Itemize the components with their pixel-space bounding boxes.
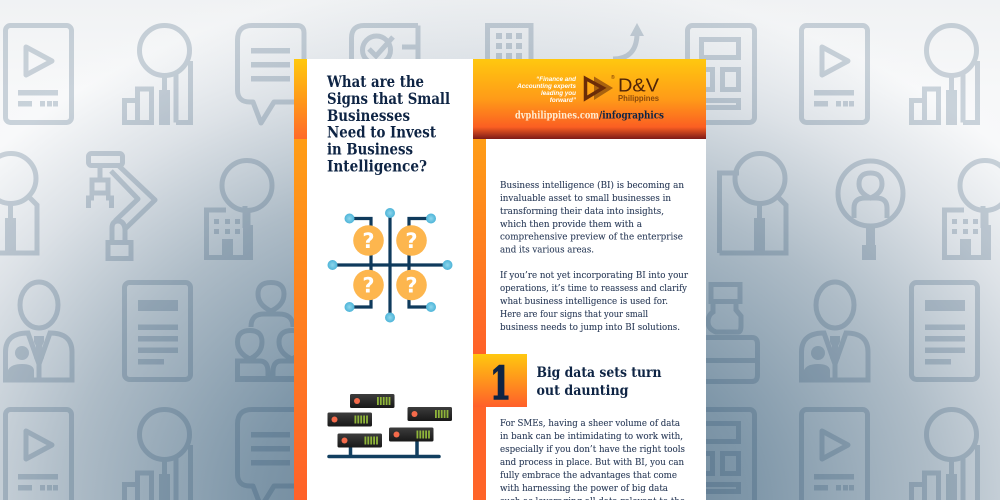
second paragraph: Here are four signs that your small [500,309,648,320]
second paragraph: operations, it’s time to reassess and clarify [500,283,688,294]
second paragraph: what business intelligence is used for. [500,296,668,307]
tagline: Accounting experts [516,83,576,90]
icon: question marks circuit: ? [362,229,375,253]
heading: big data sets [536,365,662,399]
website url: /infographics [599,110,664,122]
title [326,72,450,176]
title: Intelligence? [327,156,427,176]
website url [515,110,664,122]
title: Signs that Small [327,89,450,108]
section 1 body text: For SMEs, having a sheer volume of data [500,418,680,429]
section 1 body text: fully embrace the advantages that come [500,470,677,481]
title: in Business [327,140,413,158]
number badge 1: 1 [490,357,511,410]
intro paragraph: which then provide them with a [500,219,642,230]
intro paragraph: transforming their data into insights, [500,206,664,217]
intro paragraph: invaluable asset to small businesses in [500,193,671,204]
second paragraph: If you’re not yet incorporating BI into your [500,270,689,281]
logo: D&V Philippines: ® [611,74,615,81]
website url: dvphilippines.com [515,110,600,122]
tagline: forward” [550,97,577,104]
tagline: “Finance and [536,76,576,83]
header band [473,59,706,139]
intro paragraph [500,180,684,256]
logo: D&V Philippines: Philippines [618,94,660,103]
title: Businesses [327,106,410,125]
icon: question marks circuit: ? [362,274,375,298]
intro paragraph: Business intelligence (BI) is becoming an [500,180,684,191]
logo: D&V Philippines [586,74,660,103]
tagline [516,76,577,104]
section 1 body text: and process in place. But with BI, you can [500,457,684,468]
title: Need to Invest [327,122,437,142]
section 1 body text [500,418,685,500]
section 1 body text: especially if you don’t have the right tools [500,444,685,455]
icon: data servers [328,394,452,456]
intro paragraph: comprehensive preview of the enterprise [500,232,683,242]
title: What are the [326,72,424,91]
logo: D&V Philippines: D&V [618,74,660,96]
panel: infographic page [294,59,706,500]
number badge 1 [473,354,527,410]
second paragraph [500,270,689,333]
section 1 body text: in bank can be intimidating to work with, [500,431,683,442]
second paragraph: business needs to jump into BI solutions. [500,322,680,333]
left orange strip [294,59,307,500]
section 1 body text: with harnessing the power of big data [500,483,668,494]
icon: question marks circuit: ? [405,229,418,253]
tagline: leading you [541,90,576,97]
icon: question marks circuit: ? [405,274,418,298]
intro paragraph: and its various areas. [500,244,594,256]
icon: question marks circuit [328,208,452,322]
right column orange strip [473,139,486,500]
heading: big data sets: Big data sets turn [536,365,662,381]
heading: big data sets: out daunting [536,383,629,399]
